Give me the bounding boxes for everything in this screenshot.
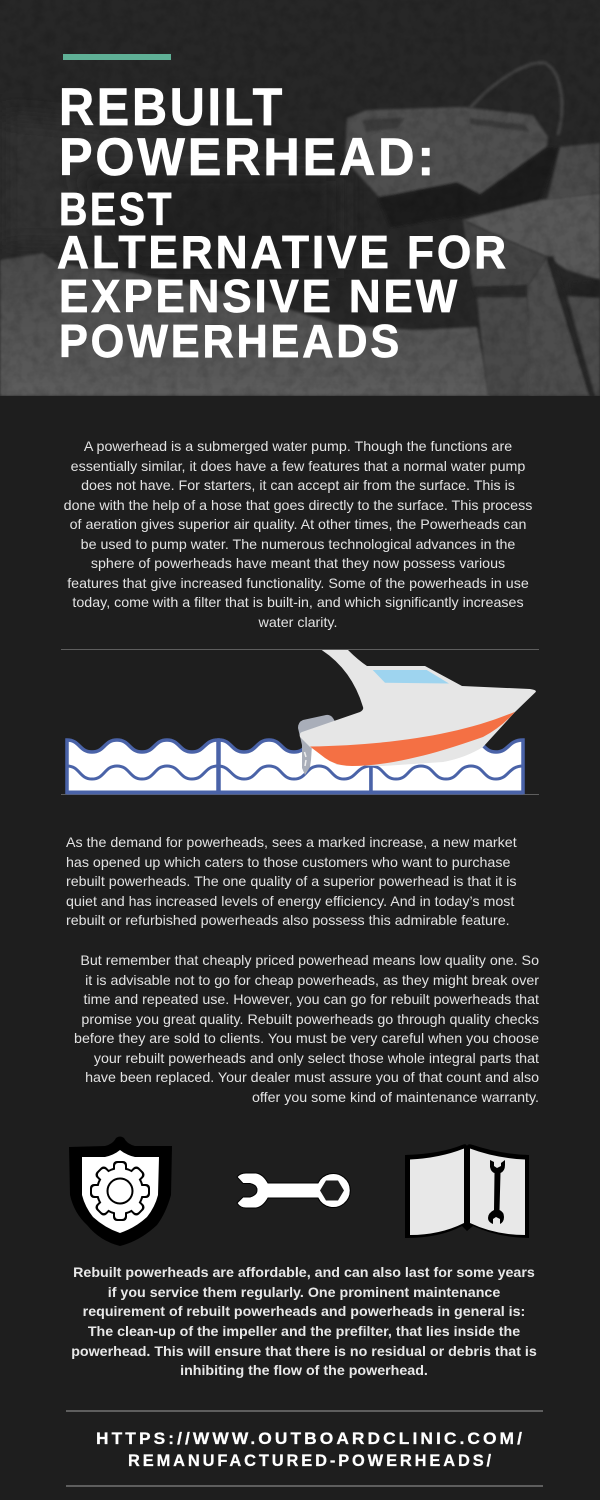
paragraph: maintenance (bold): The clean-up of the impeller and the prefilter, that lies inside the [88, 1324, 520, 1340]
waves [67, 740, 523, 792]
paragraph: maintenance (bold): if you service them regularly. One prominent maintenance [108, 1285, 500, 1301]
outboard motor [298, 715, 336, 775]
boat stripe [310, 712, 515, 766]
paragraph: rising demand: rebuilt powerheads. The one quality of a superior powerhead is that it is [66, 874, 516, 890]
intro paragraph: A powerhead is a submerged water pump. Though the functions are [84, 439, 512, 455]
paragraph: quality warning [74, 953, 539, 1106]
panel: hero header with photo background [0, 0, 600, 396]
paragraph: quality warning: time and repeated use. However, you can go for rebuilt powerheads that [84, 992, 539, 1008]
paragraph: maintenance (bold): requirement of rebuilt powerheads and powerheads in general is: [83, 1304, 525, 1320]
icon: shield with gear [69, 1136, 172, 1246]
illustration: boat on waves [65, 650, 536, 794]
intro paragraph: essentially similar, it does have a few features that a normal water pump [71, 459, 525, 475]
paragraph: rising demand: has opened up which caters to those customers who want to purchase [66, 854, 510, 870]
photo background [0, 0, 600, 396]
paragraph: quality warning: have been replaced. Your dealer must assure you of that count and also [85, 1070, 539, 1086]
title: POWERHEAD: [59, 128, 437, 187]
icon: manual book with wrench [405, 1144, 529, 1238]
intro paragraph: done with the help of a hose that goes directly to the surface. This process [64, 498, 532, 514]
paragraph: quality warning: it is advisable not to go for cheap powerheads, as they might break over [85, 972, 539, 988]
boat hull [300, 650, 536, 766]
intro paragraph: does not have. For starters, it can accept air from the surface. This is [81, 478, 515, 494]
intro paragraph: be used to pump water. The numerous technological advances in the [81, 537, 515, 553]
intro paragraph: of aeration gives superior air quality. At other times, the Powerheads can [70, 517, 526, 533]
paragraph: quality warning: promise you great quality. Rebuilt powerheads go through quality checks [81, 1012, 539, 1028]
intro paragraph [64, 439, 532, 631]
icon: wrench [236, 1172, 351, 1208]
paragraph: rising demand: As the demand for powerheads, sees a marked increase, a new market [66, 835, 517, 851]
paragraph: quality warning: your rebuilt powerheads and only select those whole integral parts that [94, 1050, 539, 1066]
paragraph: rising demand: quiet and has increased levels of energy efficiency. And in today’s most [66, 894, 514, 910]
title: POWERHEADS [59, 315, 402, 367]
source URL: REMANUFACTURED-POWERHEADS/ [128, 1451, 494, 1470]
paragraph: rising demand [66, 835, 517, 929]
title: REBUILT [59, 78, 285, 137]
paragraph: maintenance (bold): inhibiting the flow of the powerhead. [180, 1363, 428, 1379]
paragraph: maintenance (bold) [71, 1265, 537, 1379]
intro paragraph: water clarity. [259, 615, 337, 631]
paragraph: quality warning: before they are sold to clients. You must be very careful when you choose [74, 1031, 539, 1047]
source URL: HTTPS://WWW.OUTBOARDCLINIC.COM/ [96, 1429, 525, 1448]
paragraph: maintenance (bold): powerhead. This will ensure that there is no residual or debris that is [71, 1344, 537, 1360]
title: EXPENSIVE NEW [59, 270, 460, 322]
title: ALTERNATIVE FOR [57, 226, 509, 278]
paragraph: maintenance (bold): Rebuilt powerheads are affordable, and can also last for some years [73, 1265, 535, 1281]
title [57, 78, 509, 367]
intro paragraph: sphere of powerheads have meant that they now possess various [91, 556, 505, 572]
paragraph: quality warning: But remember that cheaply priced powerhead means low quality one. So [80, 953, 539, 969]
accent bar [63, 54, 171, 60]
paragraph: quality warning: offer you some kind of maintenance warranty. [252, 1090, 539, 1106]
source URL [96, 1429, 525, 1470]
boat window [373, 670, 449, 684]
title: BEST [59, 183, 174, 235]
intro paragraph: today, come with a filter that is built-in, and which significantly increases [72, 595, 524, 611]
intro paragraph: features that give increased functionality. Some of the powerheads in use [67, 576, 529, 592]
paragraph: rising demand: rebuilt or refurbished powerheads also possess this admirable feature. [66, 913, 510, 929]
